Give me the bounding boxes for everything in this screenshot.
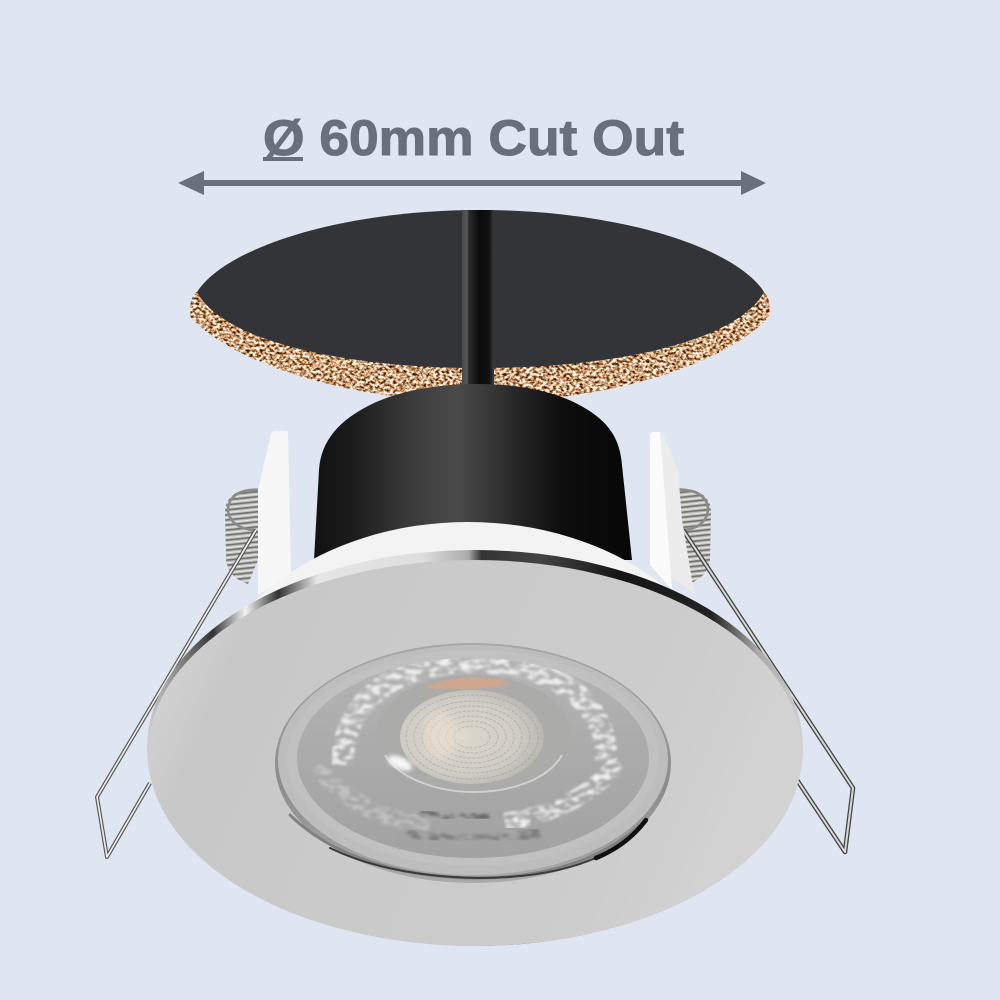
bezel face — [148, 560, 802, 946]
title: 60mm cut out: Ø 60mm Cut Out — [263, 110, 684, 166]
lens lower dark reflection — [290, 815, 646, 878]
recess highlight — [386, 752, 414, 774]
chrome bezel rim — [147, 550, 803, 946]
right spring clip wire — [683, 530, 853, 852]
ceiling board cross-section — [190, 210, 770, 402]
left spring clip wire — [97, 530, 256, 857]
white collar — [202, 522, 734, 918]
left retaining spring — [225, 488, 258, 584]
inner ring recess — [376, 675, 570, 792]
lens outer edge — [275, 643, 671, 883]
reflector glitter — [318, 662, 618, 839]
reflector — [297, 658, 649, 858]
right retaining spring — [678, 488, 711, 584]
board chipboard edge — [190, 292, 770, 402]
double-headed dimension arrow — [178, 171, 766, 195]
board dark top surface — [197, 210, 764, 368]
optic dome — [400, 690, 544, 784]
black driver housing — [314, 384, 632, 560]
lens assembly — [275, 643, 671, 883]
warm LED crescent — [426, 677, 510, 689]
right white bracket tab — [650, 432, 694, 592]
infographic canvas — [95, 118, 856, 946]
lens glass ring — [278, 645, 668, 875]
left white bracket tab — [258, 431, 291, 595]
cable rod — [462, 210, 494, 388]
